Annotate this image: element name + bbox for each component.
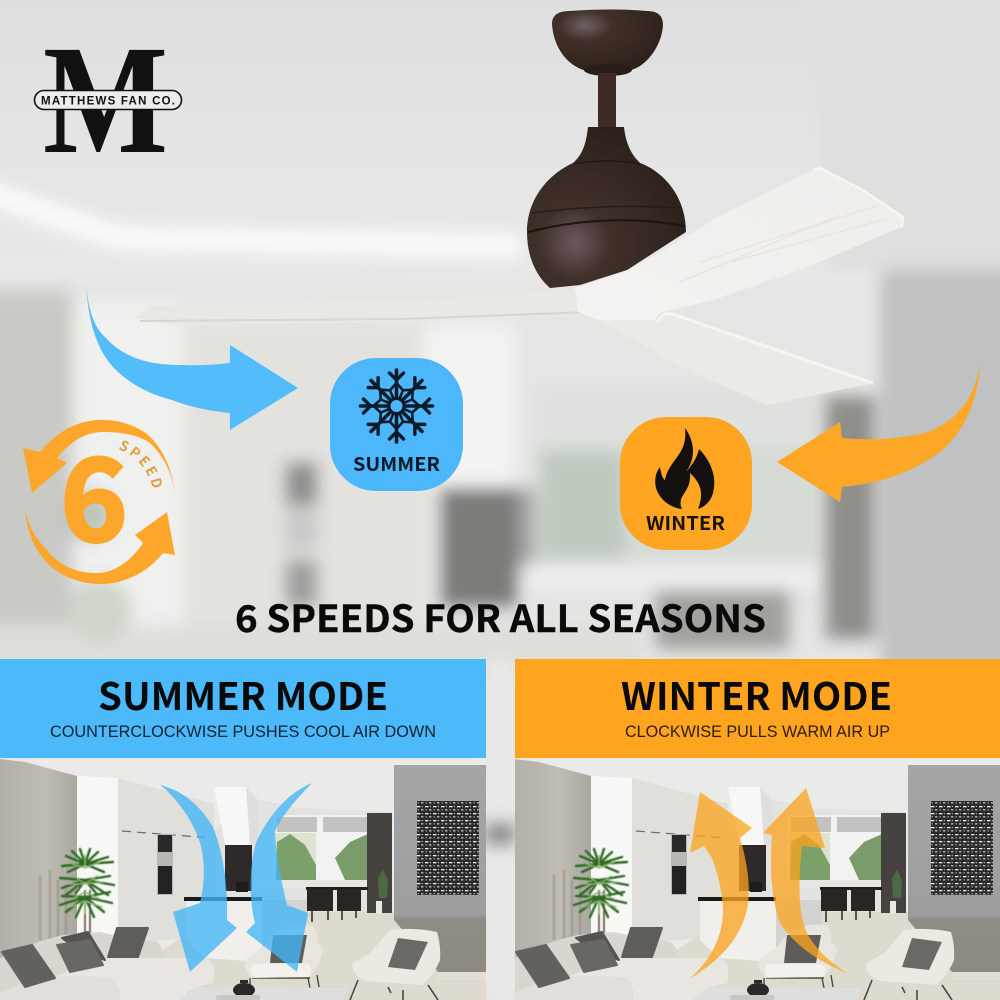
header band: summer <box>0 659 486 758</box>
icon: 6 speed <box>23 409 175 584</box>
arrow: lower rotation <box>25 510 175 584</box>
numeral 6: 6 <box>60 409 128 574</box>
icon: flame <box>655 428 714 509</box>
header band: winter: CLOCKWISE PULLS WARM AIR UP <box>625 722 890 741</box>
fan blade: lower right <box>580 312 873 405</box>
label: speed <box>118 449 152 486</box>
arrow: upper rotation <box>23 420 175 495</box>
header band: winter <box>515 659 1000 758</box>
panel: summer mode <box>0 659 487 1000</box>
fan downrod <box>584 64 632 129</box>
icon: snowflake <box>360 370 432 442</box>
room photo: winter <box>514 759 1000 1000</box>
fan canopy <box>552 10 663 73</box>
label: winter: WINTER <box>646 509 725 536</box>
fan blade: upper right <box>575 168 903 320</box>
badge: summer <box>330 358 463 491</box>
arrows: cool air pushed down <box>160 783 312 972</box>
title: 6 SPEEDS FOR ALL SEASONS <box>235 589 766 643</box>
arrow: orange winter airflow <box>777 360 980 502</box>
badge: winter <box>620 417 752 550</box>
fan blade: left <box>135 288 600 326</box>
ceiling fan <box>135 10 903 405</box>
header band: winter: WINTER MODE <box>621 666 892 721</box>
arrows: warm air pulled up <box>688 788 847 980</box>
panel: winter mode <box>514 659 1000 1000</box>
arrow: blue summer airflow <box>86 280 298 430</box>
header band: summer: SUMMER MODE <box>98 666 388 721</box>
header band: summer: COUNTERCLOCKWISE PUSHES COOL AIR DOWN <box>50 722 436 741</box>
room photo: summer <box>0 759 487 1000</box>
logo: Matthews Fan Co.: MATTHEWS FAN CO. <box>41 96 175 108</box>
fan motor housing <box>527 127 686 288</box>
logo: Matthews Fan Co.: M <box>43 13 168 186</box>
label: summer: SUMMER <box>353 450 440 477</box>
icon: 6 speed: SPEED <box>119 440 162 488</box>
